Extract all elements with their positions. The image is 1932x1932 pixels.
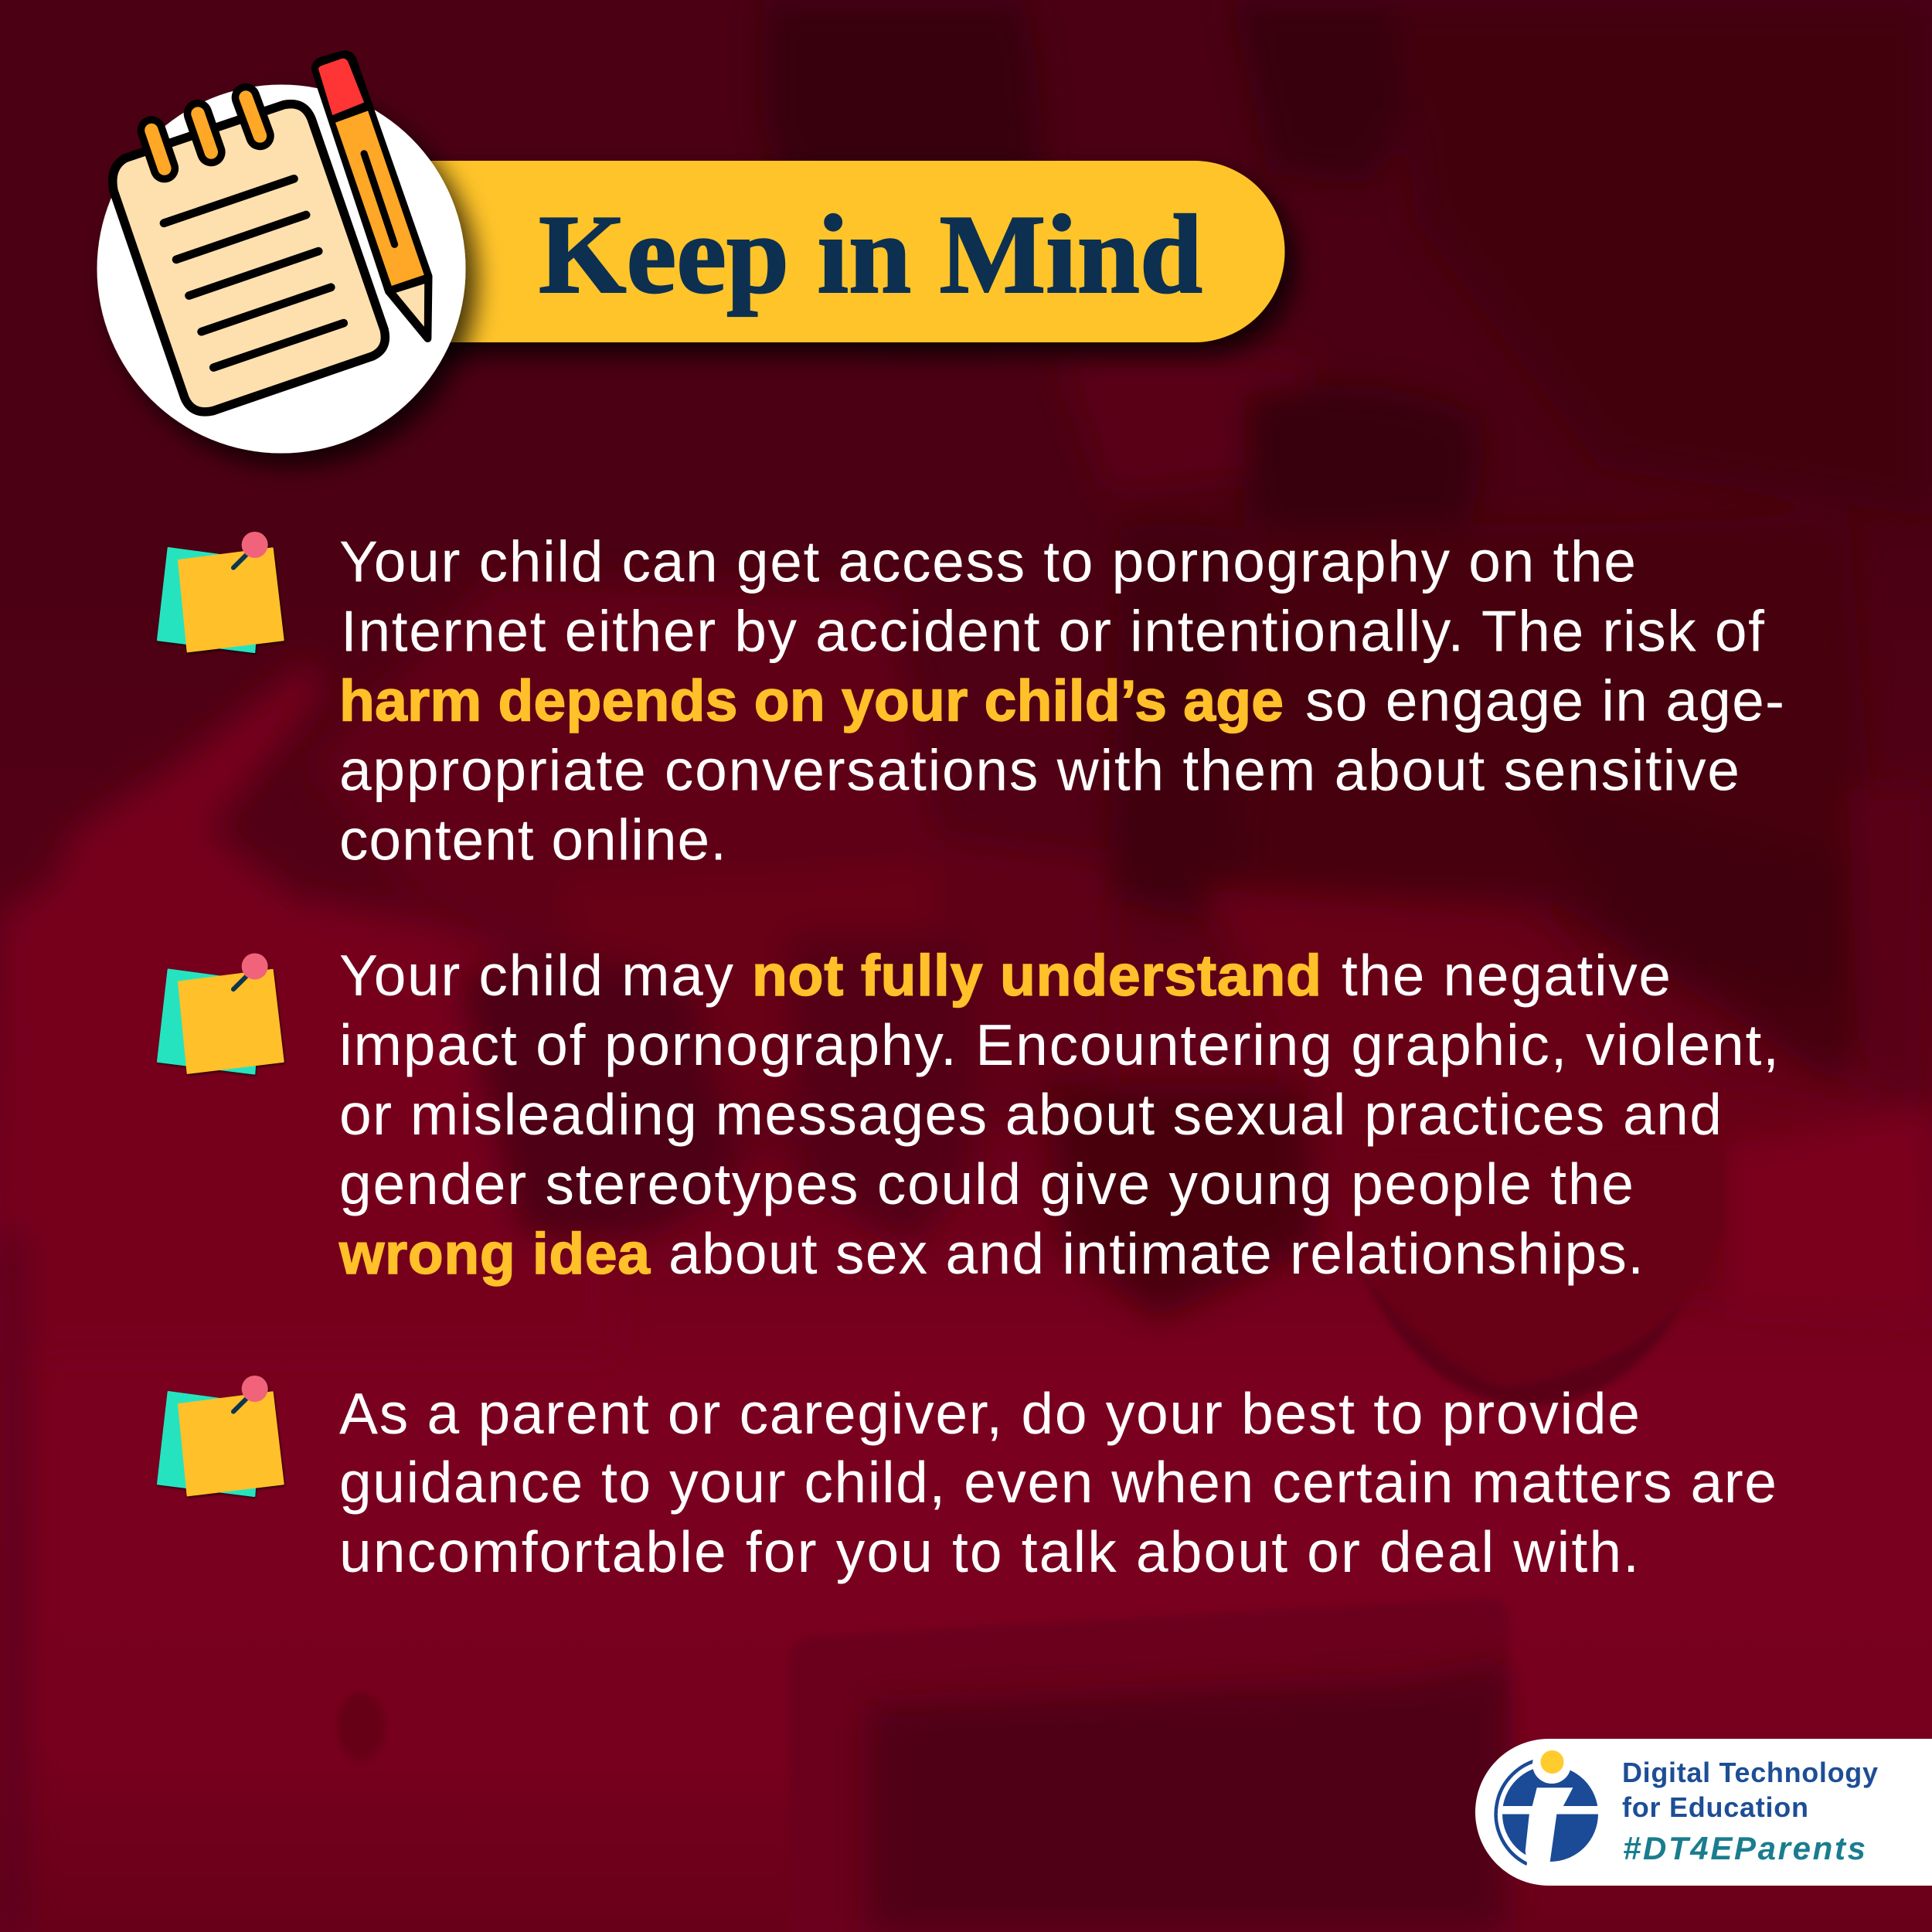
text block 2: or misleading messages about sexual practices and [339, 1082, 1722, 1147]
text block 2: about sex and intimate relationships. [668, 1221, 1644, 1286]
text block 3: guidance to your child, even when certain matters are [339, 1450, 1777, 1515]
text block 1: so engage in age- [1305, 668, 1784, 733]
logo text: Digital Technology [1622, 1757, 1878, 1788]
logo text: for Education [1622, 1791, 1808, 1823]
title banner [371, 161, 1284, 342]
text block 2: not fully understand [752, 943, 1321, 1008]
text block 2: wrong idea [338, 1221, 651, 1286]
text block 1: appropriate conversations with them about sensitive [339, 738, 1740, 803]
logo text: #DT4EParents [1623, 1830, 1866, 1866]
title text: Keep in Mind [539, 192, 1202, 317]
icon: sticky notes 1 [158, 532, 284, 652]
text block 1: Internet either by accident or intentionally. The risk of [341, 599, 1764, 664]
text block 2: Your child may [339, 943, 734, 1008]
logo panel [1475, 1739, 1932, 1886]
text block 3 [339, 1381, 1777, 1584]
text block 1 [339, 529, 1784, 872]
icon: notepad and pencil on white circle [97, 54, 465, 454]
text block 2: gender stereotypes could give young people the [339, 1151, 1634, 1216]
icon: logo [1496, 1745, 1601, 1864]
text block 3: uncomfortable for you to talk about or deal with. [339, 1519, 1639, 1584]
text block 1: content online. [339, 808, 726, 872]
icon: sticky notes 3 [158, 1376, 284, 1496]
icon: sticky notes 2 [158, 953, 284, 1073]
text block 3: As a parent or caregiver, do your best to provide [339, 1381, 1640, 1446]
text block 2: the negative [1342, 943, 1671, 1008]
text block 1: harm depends on your child’s age [339, 668, 1284, 733]
text block 1: Your child can get access to pornography on the [339, 529, 1636, 594]
logo text [1622, 1757, 1878, 1866]
text block 2 [338, 943, 1779, 1286]
text block 2: impact of pornography. Encountering graphic, violent, [339, 1012, 1779, 1077]
